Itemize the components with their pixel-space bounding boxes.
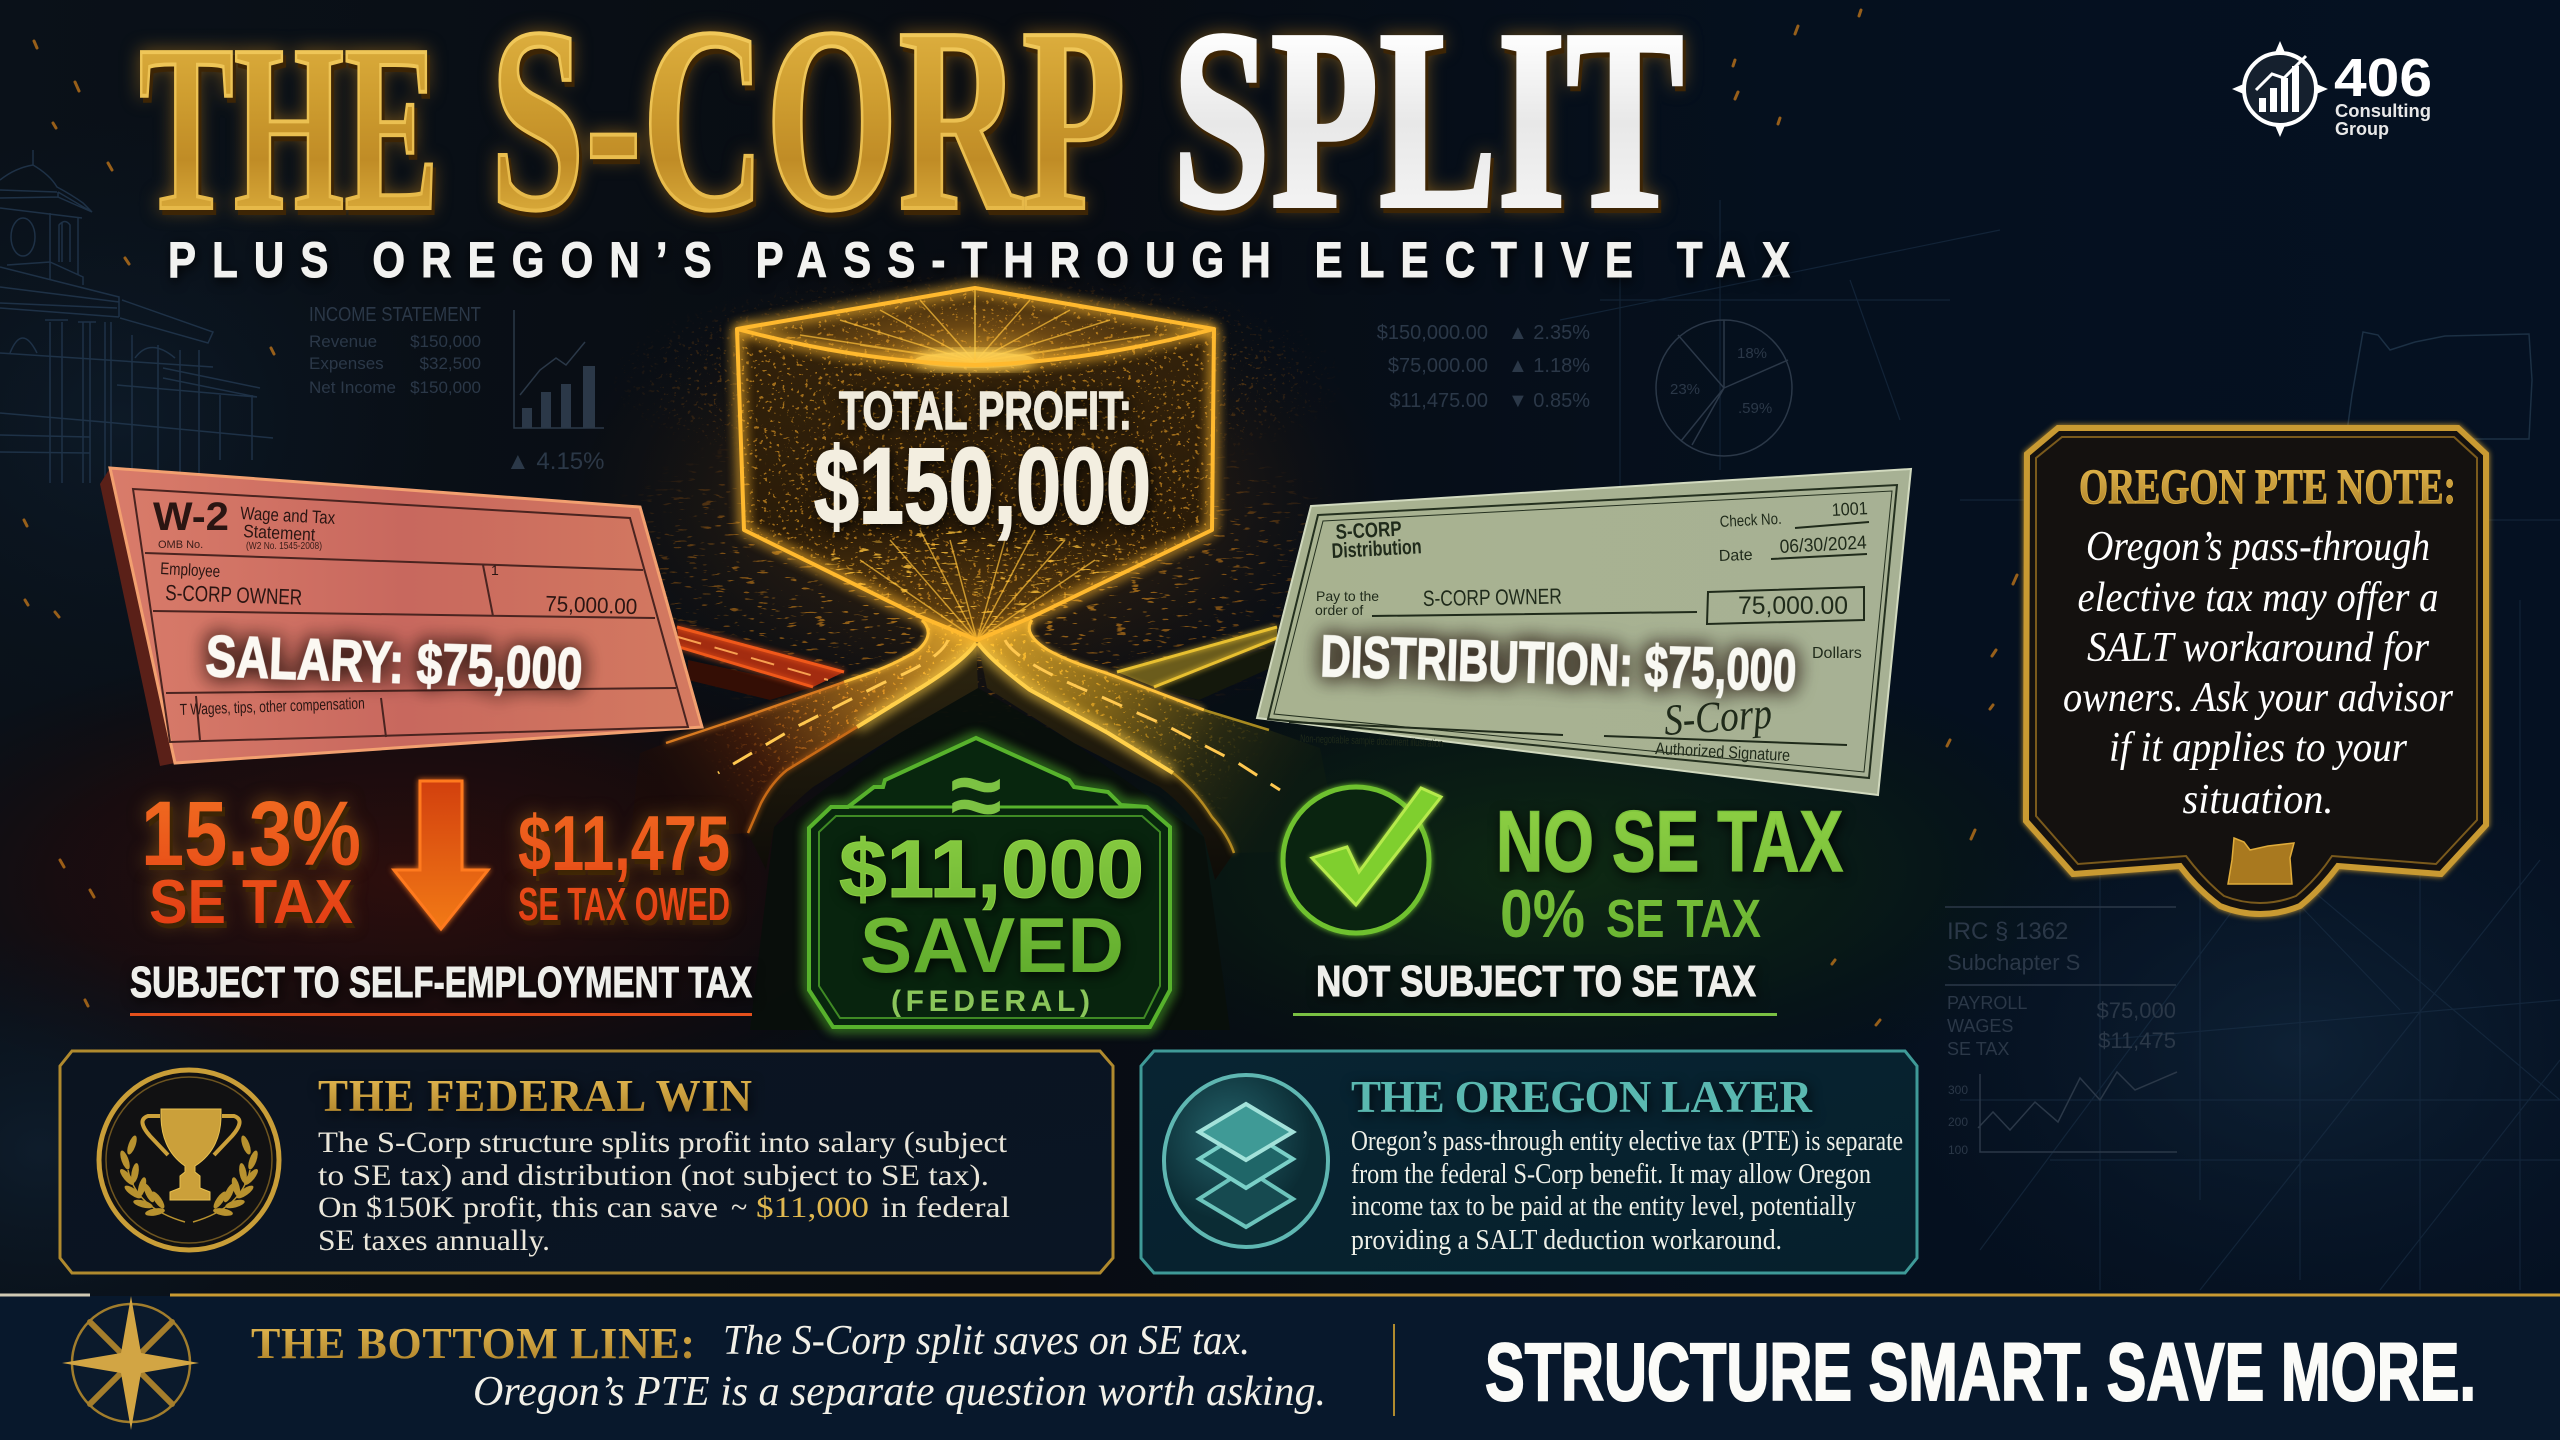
panel body: Oregon’s pass-through entity elective tax (PTE) is separate: [1351, 1125, 1903, 1157]
stat: no SE tax: SE TAX: [1606, 889, 1761, 949]
card: distribution check: order of: [1315, 602, 1363, 618]
background faint: figures and pie chart: $150,000.00: [1377, 322, 1488, 344]
card: W-2 salary: 1: [491, 562, 499, 578]
icon: green check: [1283, 787, 1441, 933]
dark ground under savings badge: [750, 688, 1230, 1030]
logo: 406 Consulting Group: [2232, 41, 2432, 139]
bottom line text: The S-Corp split saves on SE tax.: [723, 1318, 1250, 1364]
card: W-2 salary: (W2 No. 1545-2008): [246, 541, 322, 552]
road: gold left: [630, 620, 978, 870]
icon: trophy medal: [99, 1070, 279, 1250]
background faint: figures and pie chart: ▼ 0.85%: [1508, 390, 1590, 412]
panel body: in federal: [881, 1191, 1010, 1224]
card: W-2 salary: 75,000.00: [545, 591, 638, 619]
stat: 15.3% SE tax: 15.3%: [141, 783, 361, 885]
badge label: SAVED: [860, 901, 1124, 989]
card: W-2 salary: Employee: [160, 559, 221, 581]
road: olive branch to distribution: [1117, 627, 1277, 700]
background faint: irc ledger and line chart: 300: [1948, 1083, 1968, 1097]
cube label: TOTAL PROFIT:: [839, 381, 1132, 441]
background faint: irc ledger and line chart: 200: [1948, 1115, 1968, 1129]
cube edges: [737, 288, 1214, 640]
caption: not subject to SE tax: [1293, 957, 1777, 1016]
background faint: income statement: INCOME STATEMENT: [309, 304, 481, 326]
card: distribution check: Date: [1719, 547, 1753, 565]
label: distribution: DISTRIBUTION: $75,000: [1320, 624, 1797, 704]
badge symbol: ≈: [950, 742, 1002, 847]
card: distribution check: Non-negotiable sample document illustration: [1300, 733, 1443, 750]
title: [139, 0, 1684, 266]
stat: no SE tax: NO SE TAX: [1496, 794, 1843, 890]
card: distribution check: [1257, 469, 1911, 795]
card: distribution check: 06/30/2024: [1779, 532, 1868, 558]
icon: compass star: [62, 1296, 199, 1430]
cube halo and sparks: [557, 250, 1397, 750]
background faint: irc ledger and line chart: $75,000: [2096, 998, 2176, 1023]
card: distribution check: 75,000.00: [1738, 592, 1848, 620]
background faint: figures and pie chart: .59%: [1738, 400, 1772, 417]
background faint: courthouse sketch: [0, 150, 273, 483]
background faint: figures and pie chart: ▲ 1.18%: [1508, 355, 1590, 377]
card: W-2 salary: W-2: [153, 495, 229, 539]
card: W-2 salary: [100, 468, 702, 766]
note body: if it applies to your: [2109, 725, 2408, 771]
background faint: irc ledger and line chart: $11,475: [2098, 1028, 2176, 1053]
card: distribution check: S-Corp: [1662, 689, 1773, 745]
background faint: income statement: Revenue: [309, 332, 377, 351]
badge: $11,000 saved: [809, 738, 1170, 1027]
stat: 15.3% SE tax: SE TAX: [149, 868, 353, 937]
road: gold right: [977, 620, 1340, 880]
background faint: figures and pie chart: 18%: [1737, 345, 1767, 362]
background faint: irc ledger and line chart: SE TAX: [1947, 1039, 2009, 1059]
note body: [2063, 524, 2454, 823]
stat: no SE tax: [1496, 794, 1843, 952]
note body: SALT workaround for: [2087, 625, 2430, 671]
panel body: [1351, 1125, 1903, 1256]
icon: compass with bars: [2232, 41, 2328, 137]
card: distribution check: Distribution: [1331, 535, 1422, 563]
card: W-2 salary: Statement: [243, 521, 316, 545]
stat: 15.3% SE tax: [141, 783, 361, 937]
panel: bottom line band: [0, 1295, 2560, 1440]
panel body: On $150K profit, this can save: [318, 1191, 718, 1224]
background faint: irc ledger and line chart: IRC § 1362: [1947, 918, 2068, 945]
panel body: $11,000: [756, 1191, 869, 1224]
card: distribution check: Dollars: [1812, 645, 1862, 662]
icon: Oregon state: [2228, 838, 2294, 884]
background faint: income statement: $32,500: [420, 354, 481, 373]
caption: subject to SE tax: SUBJECT TO SELF-EMPLOYMENT TAX: [130, 958, 752, 1007]
card: distribution check: Authorized Signature: [1655, 739, 1791, 765]
title: THE: THE: [139, 0, 439, 260]
card: distribution check: Pay to the: [1316, 588, 1379, 604]
road: red branch to salary: [677, 627, 844, 700]
panel body: The S-Corp structure splits profit into salary (subject: [318, 1126, 1008, 1159]
note body: elective tax may offer a: [2078, 575, 2438, 621]
panel heading: THE FEDERAL WIN: [318, 1071, 752, 1121]
arrow: down: [394, 781, 488, 929]
card: W-2 salary: T Wages, tips, other compensation: [180, 696, 365, 719]
badge value: $11,000: [839, 824, 1144, 915]
panel body: from the federal S-Corp benefit. It may allow Oregon: [1351, 1158, 1871, 1190]
bottom line text: Oregon’s PTE is a separate question worth asking.: [473, 1369, 1326, 1415]
background faint: figures and pie chart: $11,475.00: [1389, 390, 1488, 412]
background faint: figures and pie chart: ▲ 2.35%: [1508, 322, 1590, 344]
cube top face: [737, 288, 1214, 365]
background faint: income statement: Net Income: [309, 378, 396, 397]
panel body: [318, 1126, 1010, 1257]
panel body: SE taxes annually.: [318, 1224, 550, 1257]
background faint: figures and pie chart: [1377, 320, 1792, 456]
background faint: income statement: $150,000: [410, 378, 481, 397]
panel: Oregon PTE note: [2026, 428, 2486, 914]
card: W-2 salary: OMB No.: [158, 539, 203, 551]
background faint: irc ledger and line chart: [1945, 907, 2177, 1157]
panel heading: THE OREGON LAYER: [1351, 1072, 1812, 1122]
logo: 406 Consulting Group: Group: [2335, 119, 2389, 139]
icon: layers medal: [1164, 1075, 1328, 1247]
background faint: income statement: ▲ 4.15%: [506, 448, 604, 475]
panel body: to SE tax) and distribution (not subject to SE tax).: [318, 1159, 989, 1192]
stat: $11,475 SE tax owed: [518, 799, 730, 930]
background faint: irc ledger and line chart: WAGES: [1947, 1016, 2013, 1036]
background faint: irc ledger and line chart: 100: [1948, 1143, 1968, 1157]
panel: the Oregon layer: [1141, 1051, 1917, 1273]
background faint: figures and pie chart: $75,000.00: [1388, 355, 1488, 377]
panel body: ~: [731, 1191, 747, 1224]
roads behind cards: [630, 620, 1340, 1030]
background faint: irc ledger and line chart: PAYROLL: [1947, 993, 2027, 1013]
logo: 406 Consulting Group: Consulting: [2335, 101, 2431, 121]
card: W-2 salary: S-CORP OWNER: [165, 580, 303, 610]
stat: $11,475 SE tax owed: $11,475: [518, 799, 730, 887]
panel: the federal win: [60, 1051, 1113, 1273]
caption: subject to SE tax: [130, 958, 752, 1016]
stat: $11,475 SE tax owed: SE TAX OWED: [518, 878, 730, 930]
label: salary: SALARY: $75,000: [205, 624, 584, 702]
logo: 406 Consulting Group: 406: [2334, 48, 2432, 108]
bottom line text: [473, 1318, 1326, 1415]
badge note: (FEDERAL): [891, 985, 1090, 1018]
cube value: $150,000: [814, 425, 1151, 546]
cube: total profit: [737, 288, 1214, 650]
background faint: irc ledger and line chart: Subchapter S: [1947, 950, 2080, 975]
background faint: income statement: $150,000: [410, 332, 481, 351]
card: distribution check: 1001: [1831, 498, 1868, 520]
background faint: oregon map outline: [2346, 332, 2532, 439]
background faint: figures and pie chart: 23%: [1670, 381, 1700, 398]
card: distribution check: Check No.: [1719, 511, 1782, 531]
cube front face: [737, 329, 1214, 640]
background faint: income statement: [309, 304, 604, 475]
caption: not subject to SE tax: NOT SUBJECT TO SE TAX: [1316, 957, 1756, 1006]
bottom line heading: THE BOTTOM LINE:: [251, 1319, 695, 1368]
card: W-2 salary: Wage and Tax: [240, 503, 336, 528]
panel body: providing a SALT deduction workaround.: [1351, 1224, 1782, 1256]
panel body: income tax to be paid at the entity level, potentially: [1351, 1190, 1856, 1222]
background sparks: [24, 10, 2017, 1025]
card: distribution check: S-CORP: [1335, 518, 1402, 544]
note body: situation.: [2182, 777, 2334, 823]
background faint: income statement: Expenses: [309, 354, 384, 373]
stat: no SE tax: 0%: [1500, 876, 1585, 952]
subtitle: PLUS OREGON’S PASS-THROUGH ELECTIVE TAX: [168, 232, 1790, 288]
card: distribution check: S-CORP OWNER: [1423, 584, 1562, 611]
note body: Oregon’s pass-through: [2086, 524, 2430, 570]
note body: owners. Ask your advisor: [2063, 675, 2454, 721]
